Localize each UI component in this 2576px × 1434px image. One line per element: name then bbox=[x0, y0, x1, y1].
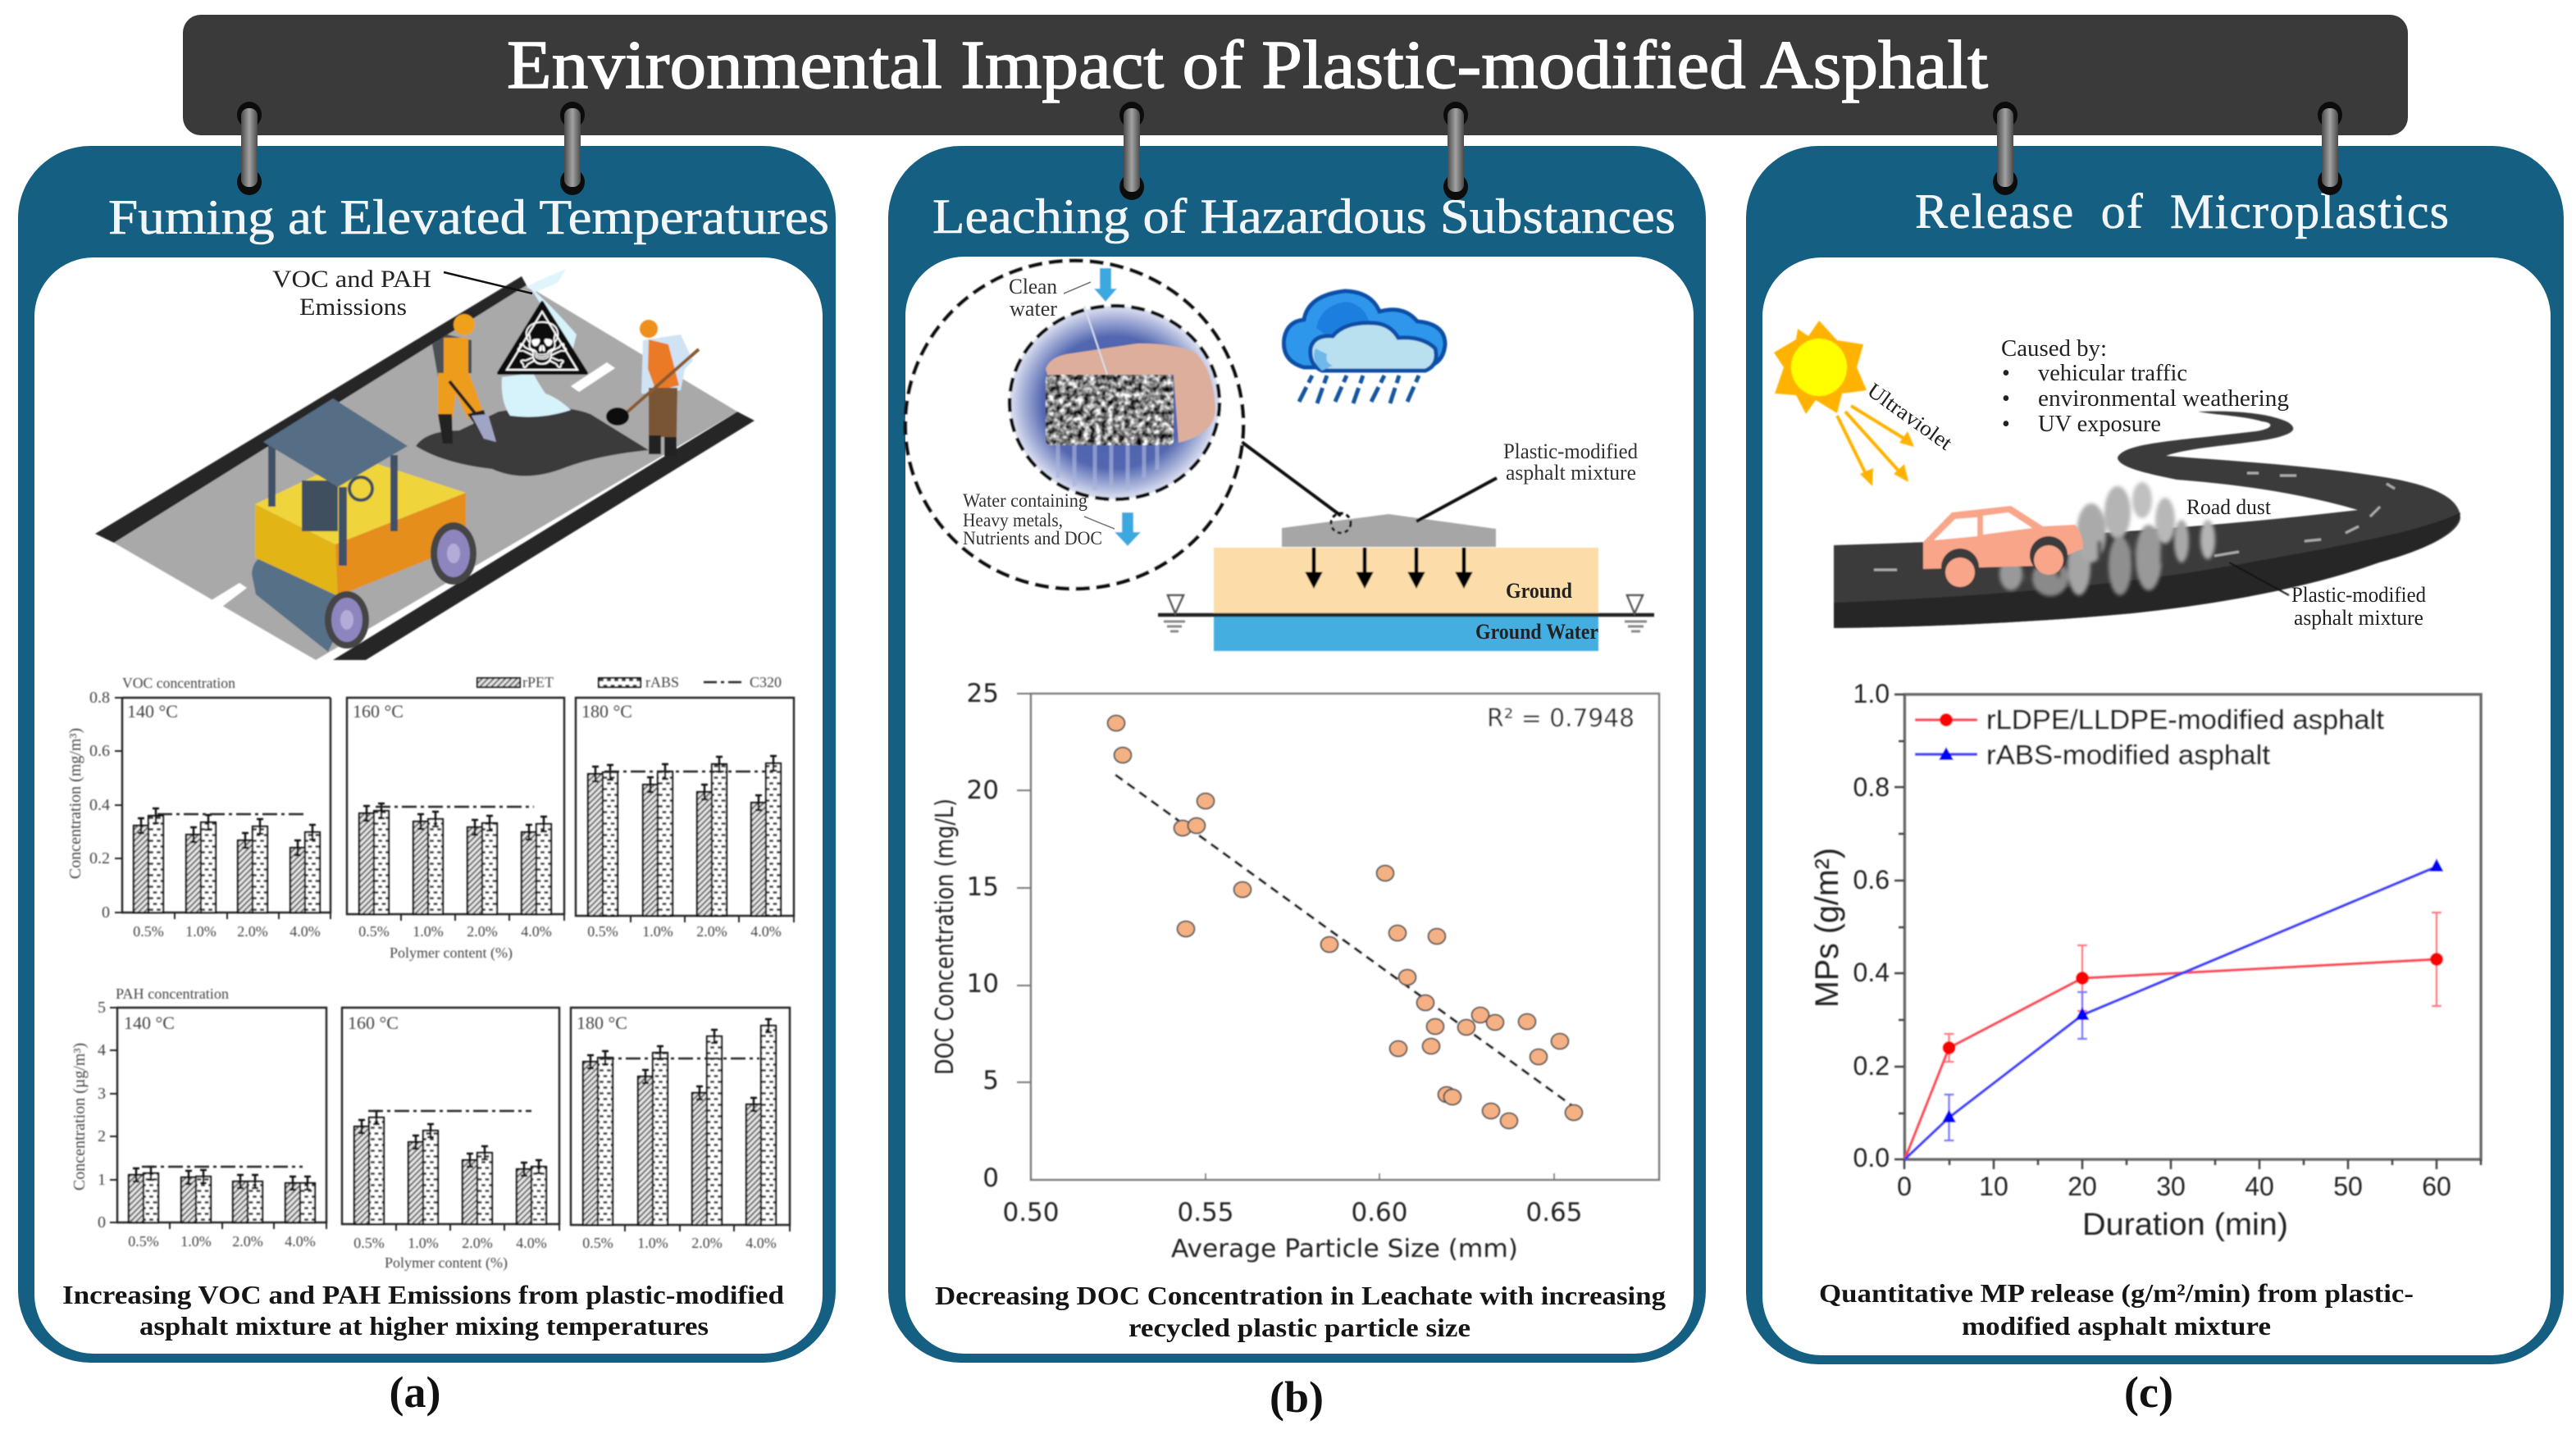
chart legend: rPET bbox=[522, 674, 554, 690]
heading: fuming: Fuming at Elevated Temperatures bbox=[108, 190, 829, 244]
worker with spade bbox=[606, 320, 699, 456]
chart: PAH concentration bbox=[71, 986, 790, 1272]
labels: leaching illustration: Water containing bbox=[963, 490, 1087, 511]
chart: PAH concentration: 3 bbox=[98, 1085, 106, 1103]
caption: panel c: modified asphalt mixture bbox=[1962, 1311, 2271, 1341]
chart: DOC scatter plot: 10 bbox=[967, 969, 999, 999]
caption: panel c: Quantitative MP release (g/m²/min) from plastic- bbox=[1819, 1278, 2414, 1308]
photo: porous asphalt sample with water bbox=[1010, 306, 1220, 499]
chart: VOC concentration: 0.2 bbox=[89, 849, 110, 867]
chart: PAH concentration: 0.5% bbox=[353, 1235, 385, 1251]
heading: microplastics: Release of Microplastics bbox=[1915, 184, 2449, 239]
text: causes list: • bbox=[2002, 412, 2010, 437]
chart: MP release line chart: 20 bbox=[2068, 1172, 2097, 1201]
chart: DOC scatter plot bbox=[931, 679, 1659, 1263]
chart: PAH concentration: 2.0% bbox=[462, 1235, 493, 1251]
chart: PAH concentration: 160 °C bbox=[348, 1013, 399, 1033]
chart: VOC concentration: 0 bbox=[102, 904, 110, 922]
chart: MP release line chart: MPs (g/m²) bbox=[1809, 848, 1845, 1008]
chart: DOC scatter plot: 0.60 bbox=[1351, 1198, 1408, 1227]
label: ultraviolet: Ultraviolet bbox=[1863, 378, 1958, 455]
chart: VOC concentration: 4.0% bbox=[750, 923, 782, 940]
labels: leaching illustration: Clean bbox=[1009, 275, 1057, 298]
magnifier: outer dashed circle bbox=[905, 261, 1243, 589]
chart: MP release line chart: 0.8 bbox=[1853, 772, 1890, 802]
car bbox=[1923, 506, 2083, 587]
labels: leaching illustration: Ground bbox=[1506, 579, 1572, 603]
labels: leaching illustration: Nutrients and DOC bbox=[963, 528, 1102, 549]
chart: DOC scatter plot: 25 bbox=[967, 679, 999, 708]
chart: MP release line chart: 10 bbox=[1979, 1172, 2008, 1201]
label: VOC and PAH emissions: VOC and PAH bbox=[272, 266, 431, 293]
chart: MP release line chart bbox=[1809, 679, 2481, 1242]
panel: release of microplastics bbox=[1746, 146, 2564, 1364]
heading: leaching: Leaching of Hazardous Substances bbox=[932, 189, 1676, 244]
chart legend: rABS bbox=[645, 674, 679, 690]
water table markers bbox=[1164, 595, 1647, 631]
chart: PAH concentration: 0.5% bbox=[128, 1233, 159, 1250]
chart: VOC concentration: 140 °C bbox=[127, 701, 178, 722]
chart: VOC concentration: 4.0% bbox=[290, 923, 321, 940]
labels: leaching illustration: Heavy metals, bbox=[963, 510, 1063, 530]
chart: DOC scatter plot: 0.65 bbox=[1525, 1198, 1583, 1227]
chart: DOC scatter plot: DOC Concentration (mg/L) bbox=[931, 799, 960, 1075]
label: (a): (a) bbox=[390, 1368, 440, 1417]
downward seepage arrows bbox=[1306, 548, 1472, 588]
illustration: leaching through pavement bbox=[905, 261, 1654, 651]
chart: MP release line chart: 0.4 bbox=[1853, 958, 1890, 987]
chart: DOC scatter plot: 5 bbox=[983, 1066, 999, 1095]
text: causes list: environmental weathering bbox=[2038, 386, 2289, 412]
arrows: ultraviolet rays bbox=[1837, 406, 1914, 486]
labels: leaching illustration: Ground Water bbox=[1475, 620, 1598, 644]
chart: PAH concentration: 180 °C bbox=[577, 1013, 627, 1033]
pavement mound bbox=[1282, 514, 1496, 547]
chart: DOC scatter plot: 0.55 bbox=[1177, 1198, 1234, 1227]
chart legend: rLDPE/LLDPE-modified asphalt bbox=[1986, 704, 2384, 735]
caption: panel b bbox=[935, 1281, 1666, 1342]
chart: VOC concentration: 2.0% bbox=[696, 923, 727, 940]
chart: PAH concentration: Concentration (µg/m³) bbox=[71, 1043, 89, 1190]
groundwater layer bbox=[1214, 614, 1598, 651]
chart: PAH concentration: Polymer content (%) bbox=[385, 1254, 508, 1272]
series: rLDPE/LLDPE bbox=[1904, 913, 2443, 1159]
label: plastic-modified asphalt mixture: asphalt mixture bbox=[2294, 606, 2423, 630]
chart: MP release line chart: 1.0 bbox=[1853, 679, 1890, 708]
label: plastic-modified asphalt mixture: Plastic-modified bbox=[2291, 583, 2426, 607]
chart: DOC scatter plot: 15 bbox=[967, 872, 999, 902]
chart: VOC concentration: 0.6 bbox=[89, 742, 110, 760]
chart: MP release line chart: 0.0 bbox=[1853, 1143, 1890, 1172]
panel: leaching of hazardous substances bbox=[888, 146, 1706, 1363]
panel: fuming at elevated temperatures bbox=[18, 146, 836, 1363]
chart: PAH concentration: PAH concentration bbox=[116, 986, 229, 1002]
caption: panel a bbox=[62, 1280, 784, 1341]
cloud and rain icon bbox=[1284, 291, 1445, 403]
text: causes list: • bbox=[2002, 361, 2010, 386]
text: causes list: • bbox=[2002, 386, 2010, 412]
chart: VOC concentration: 2.0% bbox=[467, 923, 498, 940]
label: road dust: Road dust bbox=[2186, 495, 2272, 519]
label: VOC and PAH emissions: Emissions bbox=[299, 294, 407, 321]
roller compactor bbox=[252, 398, 476, 652]
chart: VOC concentration: 0.5% bbox=[358, 923, 390, 940]
caption: panel b: Decreasing DOC Concentration in Leachate with increasing bbox=[935, 1281, 1666, 1310]
road bbox=[1834, 412, 2460, 628]
series: rABS bbox=[1904, 858, 2444, 1159]
chart: PAH concentration: 1.0% bbox=[637, 1235, 668, 1251]
illustration: road paving crew bbox=[95, 269, 755, 660]
icon: hazard skull triangle bbox=[499, 303, 586, 384]
chart: DOC scatter plot: R² = 0.7948 bbox=[1487, 704, 1635, 733]
chart: VOC concentration: 2.0% bbox=[237, 923, 268, 940]
caption: panel a: Increasing VOC and PAH Emissions from plastic-modified bbox=[62, 1280, 784, 1309]
chart: VOC concentration: 1.0% bbox=[642, 923, 673, 940]
chart: VOC concentration: 180 °C bbox=[581, 701, 632, 722]
chart: VOC concentration: 160 °C bbox=[353, 701, 403, 722]
chart: PAH concentration: 5 bbox=[98, 999, 106, 1017]
text: causes list: UV exposure bbox=[2038, 412, 2161, 437]
chart legend: C320 bbox=[750, 674, 782, 690]
worker with shovel bbox=[432, 314, 496, 444]
chart: PAH concentration: 1.0% bbox=[408, 1235, 439, 1251]
chart legend bbox=[477, 674, 782, 690]
illustration: road with car and dust bbox=[1774, 321, 2460, 628]
icon: hazard skull triangle: ☠ bbox=[513, 310, 571, 384]
text: causes list: vehicular traffic bbox=[2038, 361, 2187, 386]
chart: MP release line chart: 0.6 bbox=[1853, 865, 1890, 895]
title banner bbox=[183, 15, 2408, 135]
chart: MP release line chart: 30 bbox=[2156, 1172, 2186, 1201]
chart: PAH concentration: 140 °C bbox=[124, 1013, 175, 1033]
road dust bbox=[1999, 482, 2215, 596]
chart: PAH concentration: 0.5% bbox=[582, 1235, 613, 1251]
caption: panel b: recycled plastic particle size bbox=[1128, 1313, 1470, 1342]
chart: MP release line chart: 60 bbox=[2422, 1172, 2451, 1201]
chart: VOC concentration: 0.8 bbox=[89, 689, 110, 707]
labels: leaching illustration bbox=[963, 275, 1638, 644]
chart legend: rABS-modified asphalt bbox=[1986, 740, 2270, 770]
icon: sun bbox=[1774, 321, 1867, 414]
chart: VOC concentration: 4.0% bbox=[521, 923, 552, 940]
label: plastic-modified asphalt mixture bbox=[2291, 583, 2426, 630]
labels: leaching illustration: water bbox=[1010, 297, 1057, 321]
chart: VOC concentration: Concentration (mg/m³) bbox=[66, 728, 84, 879]
water table line bbox=[1158, 613, 1654, 617]
chart: PAH concentration: 1 bbox=[98, 1171, 106, 1189]
chart: PAH concentration: 4.0% bbox=[745, 1235, 777, 1251]
labels: leaching illustration: asphalt mixture bbox=[1506, 461, 1636, 485]
chart: MP release line chart: 0 bbox=[1897, 1172, 1912, 1201]
chart: DOC scatter plot: Average Particle Size (mm) bbox=[1171, 1235, 1518, 1263]
label: (c): (c) bbox=[2124, 1368, 2173, 1417]
label: (b): (b) bbox=[1270, 1373, 1324, 1422]
label: VOC and PAH emissions bbox=[272, 266, 532, 321]
caption: panel a: asphalt mixture at higher mixing temperatures bbox=[139, 1311, 709, 1341]
chart: DOC scatter plot: 20 bbox=[967, 776, 999, 805]
chart: VOC concentration bbox=[66, 674, 794, 962]
chart: PAH concentration: 4.0% bbox=[285, 1233, 316, 1250]
chart: PAH concentration: 2 bbox=[98, 1127, 106, 1145]
chart: MP release line chart: 40 bbox=[2245, 1172, 2274, 1201]
arrow: leachate out bbox=[1115, 512, 1141, 546]
title: Environmental Impact of Plastic-modified Asphalt bbox=[507, 27, 1988, 103]
labels: leaching illustration: Plastic-modified bbox=[1503, 439, 1638, 463]
chart: VOC concentration: 1.0% bbox=[413, 923, 444, 940]
chart: MP release line chart: Duration (min) bbox=[2082, 1208, 2288, 1242]
chart legend bbox=[1915, 704, 2384, 770]
chart: VOC concentration: 0.4 bbox=[89, 796, 110, 814]
chart: PAH concentration: 4 bbox=[98, 1041, 106, 1059]
chart: MP release line chart: 50 bbox=[2333, 1172, 2363, 1201]
binder rings bbox=[237, 102, 2342, 200]
chart: DOC scatter plot: 0.50 bbox=[1002, 1198, 1060, 1227]
chart: PAH concentration: 1.0% bbox=[180, 1233, 212, 1250]
ground layer bbox=[1214, 548, 1598, 614]
text: causes list: Caused by: bbox=[2001, 336, 2107, 362]
text: causes list bbox=[2001, 336, 2289, 437]
chart: VOC concentration: 0.5% bbox=[133, 923, 164, 940]
chart: PAH concentration: 2.0% bbox=[691, 1235, 723, 1251]
chart: PAH concentration: 2.0% bbox=[232, 1233, 263, 1250]
chart: VOC concentration: Polymer content (%) bbox=[390, 945, 513, 962]
arrow: clean water in bbox=[1094, 268, 1117, 302]
chart: DOC scatter plot: 0 bbox=[983, 1163, 999, 1193]
chart: VOC concentration: VOC concentration bbox=[122, 675, 235, 691]
caption: panel c bbox=[1819, 1278, 2414, 1341]
chart: VOC concentration: 0.5% bbox=[587, 923, 618, 940]
chart: PAH concentration: 4.0% bbox=[516, 1235, 547, 1251]
chart: PAH concentration: 0 bbox=[98, 1213, 106, 1231]
chart: MP release line chart: 0.2 bbox=[1853, 1051, 1890, 1081]
chart: VOC concentration: 1.0% bbox=[185, 923, 217, 940]
